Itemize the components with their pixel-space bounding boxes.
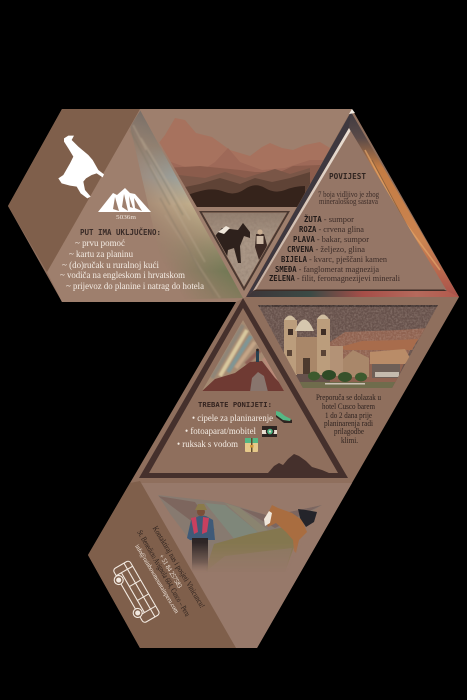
- mineral list: ZELENA - filit, feromagnezijevi minerali: [269, 273, 401, 283]
- included list: ~ prvu pomoć: [75, 238, 125, 248]
- bevelled triangle: [253, 128, 447, 291]
- mineral list: SMEĐA - fanglomerat magnezija: [275, 264, 379, 274]
- guide: [255, 234, 267, 260]
- mineral list: PLAVA - bakar, sumpor: [293, 234, 369, 244]
- icon: backpack: [245, 438, 258, 452]
- photo: horse and guide: [199, 211, 290, 291]
- panel: history pyramid: [246, 109, 459, 297]
- contact text line 3: St. Benedicto Avignola 604, Cusco – Peru: [135, 528, 192, 618]
- bring list: • ruksak s vodom: [177, 439, 238, 449]
- big roof: [370, 349, 410, 364]
- included list: [60, 238, 204, 291]
- mineral list: ROZA - crvena glina: [299, 224, 364, 234]
- second church: [342, 350, 369, 377]
- cusco note text: [316, 392, 381, 445]
- dark triangle frame: [139, 298, 348, 478]
- icon: camera: [262, 426, 277, 437]
- light inverted triangle: [131, 483, 352, 648]
- included list heading: PUT IMA UKLJUČENO:: [80, 228, 161, 237]
- illustration: layered mountains: [160, 118, 330, 207]
- base shape: [8, 109, 459, 648]
- included list: ~ prijevoz do planine i natrag do hotela: [66, 281, 204, 291]
- history heading: POVIJEST: [329, 172, 366, 181]
- left dark section: [8, 109, 140, 272]
- mineral list: CRVENA - željezo, glina: [287, 244, 365, 254]
- horse: [214, 223, 250, 265]
- panel: what to bring: [139, 298, 348, 478]
- cusco note text: planinarenja radi: [324, 418, 373, 428]
- cusco note text: Preporuča se dolazak u: [316, 392, 381, 402]
- panel: route hexagon: [8, 108, 352, 302]
- cusco note text: prilagodbe: [334, 426, 364, 436]
- cusco note text: klimi.: [341, 435, 358, 445]
- history intro: 7 boja vidljivo je zbog: [318, 189, 380, 199]
- photo: guide and horse: [158, 495, 322, 569]
- panel: cusco note: [255, 304, 440, 445]
- included list: ~ (do)ručak u ruralnoj kući: [62, 260, 159, 270]
- light section: [47, 109, 352, 302]
- mineral list: ŽUTA - sumpor: [304, 214, 354, 224]
- cusco note text: 1 do 2 dana prije: [325, 410, 372, 420]
- cusco note text: hotel Cusco barem: [322, 401, 375, 411]
- guide: [187, 516, 215, 540]
- photo: cusco cathedral square: [255, 304, 440, 390]
- contact text line 2: + 51 84 257583: [157, 553, 184, 590]
- history intro: mineraloškog sastava: [319, 196, 378, 206]
- bring list: • cipele za planinarenje: [192, 413, 273, 423]
- contact text line 1: Kontaktiraj nas i posjeti Vinicuncu!: [151, 524, 207, 610]
- mineral list: BIJELA - kvarc, pješčani kamen: [281, 254, 388, 264]
- photo: rainbow mountain with hiker: [202, 320, 284, 391]
- bring heading: TREBATE PONIJETI:: [198, 401, 272, 409]
- contact text line 4: info@rainbowmountainperu.com: [133, 543, 180, 615]
- infographic canvas: [8, 109, 459, 648]
- rainbow frame: [246, 112, 459, 297]
- horse: [264, 505, 307, 553]
- icon: mountain silhouette: [268, 454, 329, 473]
- icon: green shoe: [276, 411, 292, 423]
- included list: ~ vodiča na engleskom i hrvatskom: [60, 270, 185, 280]
- bring list: • fotoaparat/mobitel: [185, 426, 256, 436]
- icon: white mountain: [98, 188, 151, 212]
- trees: [308, 372, 320, 380]
- elevation label: 5036m: [116, 214, 136, 221]
- dark contact section: [88, 481, 236, 648]
- history intro: [318, 189, 380, 206]
- icon: white llama: [58, 136, 104, 198]
- panel: contact hexagon: [88, 481, 352, 648]
- rainbow mountain strip: [130, 108, 248, 300]
- icon: bus: [109, 560, 160, 626]
- cathedral: [284, 320, 297, 375]
- mineral list: [269, 214, 401, 283]
- bring list: [177, 413, 273, 449]
- included list: ~ kartu za planinu: [69, 249, 133, 259]
